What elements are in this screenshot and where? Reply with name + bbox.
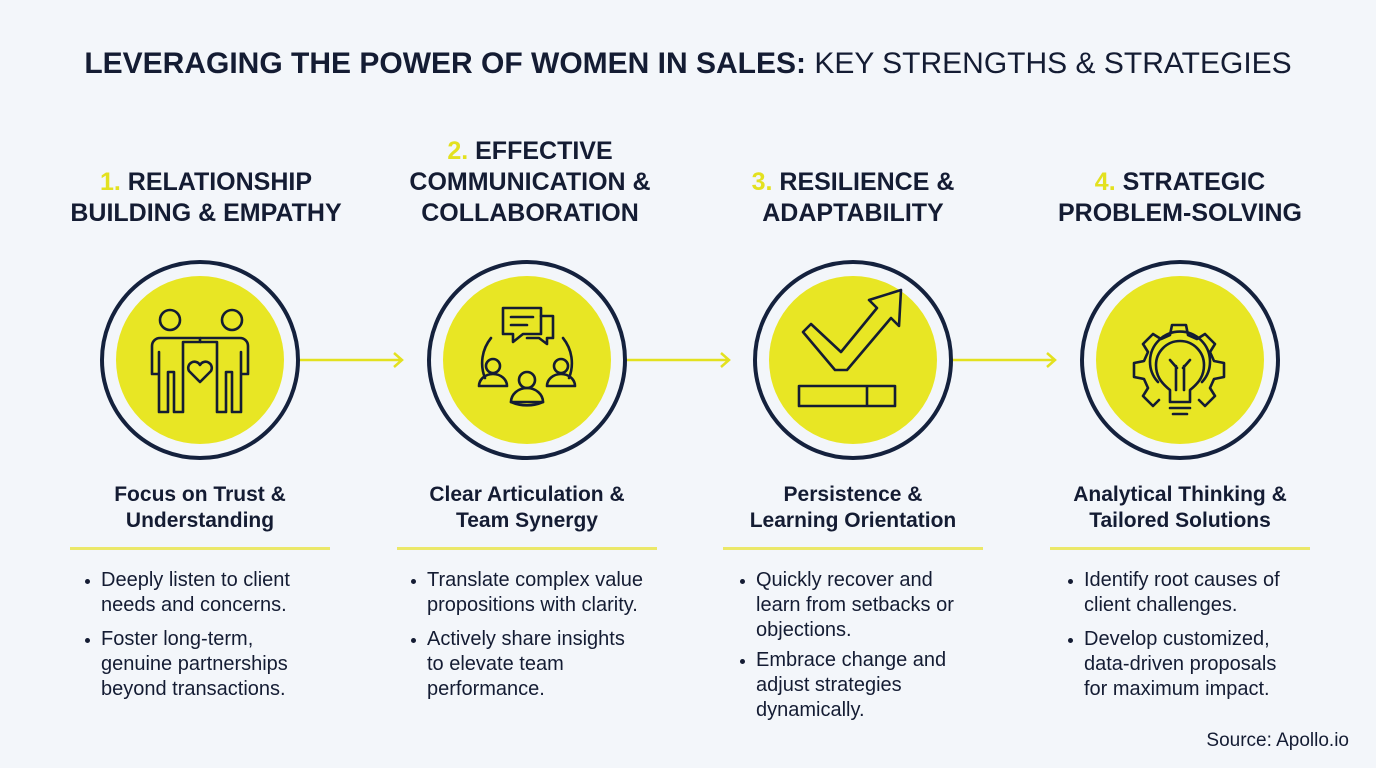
icon: two people with heart — [100, 260, 300, 460]
bullets 2: Actively share insights — [427, 628, 625, 650]
subheading 3 — [750, 483, 956, 532]
heading 4 — [1058, 168, 1302, 227]
bullets 4: Develop customized, — [1084, 628, 1270, 650]
bullets 2: to elevate team — [427, 653, 564, 675]
bullets 1 — [85, 569, 290, 700]
bullets 1: genuine partnerships — [101, 653, 288, 675]
subheading 2: Team Synergy — [456, 509, 598, 532]
subheading 3: Learning Orientation — [750, 509, 956, 532]
subheading 2 — [429, 483, 625, 532]
bullets 1: Deeply listen to client — [101, 569, 290, 591]
bullets 1: Foster long-term, — [101, 628, 253, 650]
bullets 3: learn from setbacks or — [756, 594, 954, 616]
bullets 3 — [740, 569, 954, 721]
heading 3: 3. RESILIENCE & — [752, 168, 954, 196]
bullets 4 — [1068, 569, 1280, 700]
source note: Source: Apollo.io — [1206, 730, 1349, 751]
arrow 1 — [300, 352, 404, 368]
subheading 4 — [1073, 483, 1287, 532]
subheading 4: Tailored Solutions — [1089, 509, 1271, 532]
subheading 2: Clear Articulation & — [429, 483, 625, 506]
bullets 4: for maximum impact. — [1084, 678, 1270, 700]
heading 3: ADAPTABILITY — [762, 199, 944, 227]
arrow 2 — [627, 352, 731, 368]
bullets 3: dynamically. — [756, 699, 865, 721]
heading 1: BUILDING & EMPATHY — [70, 199, 342, 227]
bullets 1: beyond transactions. — [101, 678, 286, 700]
arrow 3 — [953, 352, 1057, 368]
heading 4: PROBLEM-SOLVING — [1058, 199, 1302, 227]
heading 2: 2. EFFECTIVE — [447, 137, 613, 165]
heading 2: COLLABORATION — [421, 199, 639, 227]
bullets 3: adjust strategies — [756, 674, 902, 696]
icon: chat and team — [427, 260, 627, 460]
bullets 2: Translate complex value — [427, 569, 643, 591]
subheading 1: Focus on Trust & — [114, 483, 286, 506]
heading 4: 4. STRATEGIC — [1095, 168, 1265, 196]
bullets 2: performance. — [427, 678, 545, 700]
subheading 1: Understanding — [126, 509, 274, 532]
column 3 text — [723, 483, 983, 721]
bullets 3: Quickly recover and — [756, 569, 933, 591]
bullets 2 — [411, 569, 643, 700]
column 1 text — [70, 483, 330, 700]
bullets 3: objections. — [756, 619, 852, 641]
heading 1: 1. RELATIONSHIP — [100, 168, 312, 196]
title: LEVERAGING THE POWER OF WOMEN IN SALES: KEY STRENGTHS & STRATEGIES — [84, 47, 1292, 80]
bullets 4: client challenges. — [1084, 594, 1237, 616]
bullets 4: Identify root causes of — [1084, 569, 1280, 591]
subheading 3: Persistence & — [784, 483, 922, 506]
bullets 1: needs and concerns. — [101, 594, 287, 616]
icon: gear with lightbulb — [1080, 260, 1280, 460]
subheading 1 — [114, 483, 286, 532]
icon: rebound arrow — [753, 260, 953, 460]
heading 2 — [409, 137, 651, 227]
column 2 text — [397, 483, 657, 700]
bullets 2: propositions with clarity. — [427, 594, 638, 616]
subheading 4: Analytical Thinking & — [1073, 483, 1287, 506]
heading 2: COMMUNICATION & — [409, 168, 651, 196]
heading 1 — [70, 168, 342, 227]
heading 3 — [752, 168, 954, 227]
bullets 4: data-driven proposals — [1084, 653, 1276, 675]
column 4 text — [1050, 483, 1310, 700]
bullets 3: Embrace change and — [756, 649, 946, 671]
